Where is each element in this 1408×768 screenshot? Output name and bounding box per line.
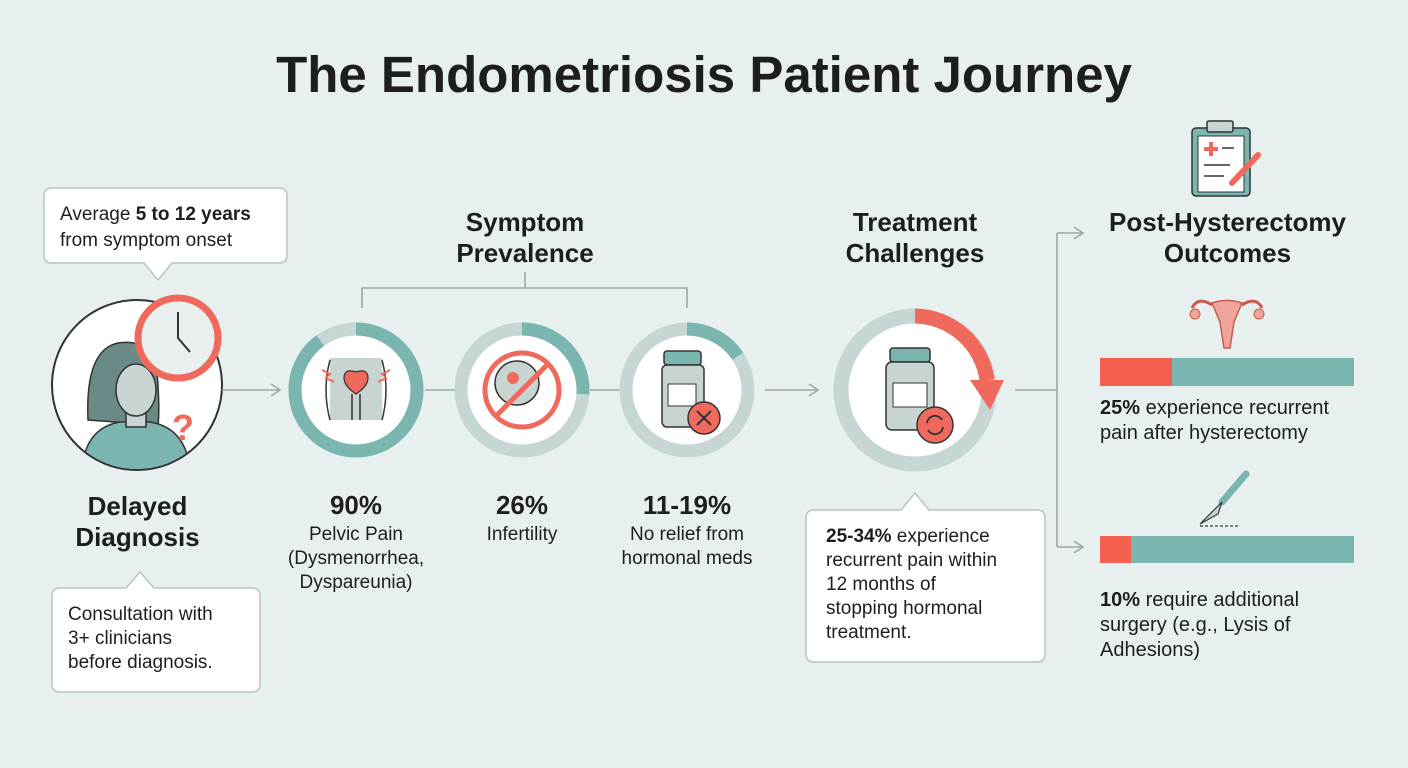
stat: 11-19%: No relief from bbox=[630, 524, 744, 545]
text: treatment callout: 12 months of bbox=[826, 574, 936, 595]
stat: 90%: (Dysmenorrhea, bbox=[288, 548, 424, 569]
ring: hormonal meds 11-19% bbox=[626, 329, 748, 451]
text: 25%: 25% experience recurrent pain after hysterectomy bbox=[1100, 397, 1329, 444]
callout: onset bbox=[44, 188, 287, 280]
ring: infertility 26% bbox=[461, 329, 583, 451]
heading: symptom prevalence: Symptom bbox=[466, 207, 584, 237]
text: treatment callout bbox=[826, 526, 997, 643]
heading: delayed diagnosis: Diagnosis bbox=[75, 522, 200, 552]
bracket bbox=[362, 272, 687, 308]
stat: 90%: Pelvic Pain bbox=[309, 524, 403, 545]
text: clinicians: 3+ clinicians bbox=[68, 628, 172, 649]
callout: clinicians bbox=[52, 572, 260, 692]
heading: treatment challenges bbox=[846, 207, 984, 268]
text: treatment callout: treatment. bbox=[826, 622, 912, 643]
heading: delayed diagnosis: Delayed bbox=[88, 491, 187, 521]
text: treatment callout: 25-34% experience bbox=[826, 526, 990, 547]
text: clinicians: before diagnosis. bbox=[68, 652, 213, 673]
heading: treatment challenges: Challenges bbox=[846, 238, 984, 268]
heading: symptom prevalence bbox=[456, 207, 594, 268]
stat: 11-19%: hormonal meds bbox=[622, 548, 752, 569]
text: onset callout bbox=[60, 204, 251, 251]
text: onset callout: Average 5 to 12 years bbox=[60, 204, 251, 225]
text: treatment callout: recurrent pain within bbox=[826, 550, 997, 571]
text: onset callout: from symptom onset bbox=[60, 230, 232, 251]
heading: symptom prevalence: Prevalence bbox=[456, 238, 594, 268]
icon: uterus bbox=[1190, 300, 1264, 348]
bar: 25% bbox=[1100, 358, 1354, 386]
bar: 10% bbox=[1100, 536, 1354, 563]
text: treatment callout: stopping hormonal bbox=[826, 598, 982, 619]
heading: post-hysterectomy bbox=[1109, 207, 1346, 268]
stat: 11-19%: 11-19% bbox=[643, 490, 731, 520]
icon: clipboard bbox=[1192, 121, 1258, 196]
stat: 11-19% bbox=[622, 490, 752, 569]
ring: treatment challenges bbox=[841, 316, 1004, 464]
icon: person with clock bbox=[52, 298, 222, 470]
stat: 90%: 90% bbox=[330, 490, 382, 520]
arrows between stages bbox=[222, 233, 1083, 547]
stat: 26%: 26% bbox=[496, 490, 548, 520]
heading: post-hysterectomy: Post-Hysterectomy bbox=[1109, 207, 1346, 237]
ring: pelvic pain 90% bbox=[295, 329, 417, 451]
heading: treatment challenges: Treatment bbox=[853, 207, 977, 237]
diagram graphics bbox=[43, 120, 1354, 693]
text: 10%: 10% require additional surgery (e.g., Lysis of Adhesions) bbox=[1100, 589, 1299, 661]
heading: delayed diagnosis bbox=[75, 491, 200, 552]
text: clinicians: Consultation with bbox=[68, 604, 213, 625]
text: clinicians bbox=[68, 604, 213, 673]
callout: treatment bbox=[806, 493, 1045, 662]
stat: 26% bbox=[487, 490, 558, 545]
icon: scalpel bbox=[1200, 474, 1246, 526]
icon: person with clock: ? bbox=[172, 407, 194, 448]
heading: post-hysterectomy: Outcomes bbox=[1164, 238, 1291, 268]
title: The Endometriosis Patient Journey bbox=[276, 46, 1132, 103]
stat: 90%: Dyspareunia) bbox=[300, 572, 412, 593]
stat: 90% bbox=[288, 490, 424, 593]
stat: 26%: Infertility bbox=[487, 524, 557, 545]
